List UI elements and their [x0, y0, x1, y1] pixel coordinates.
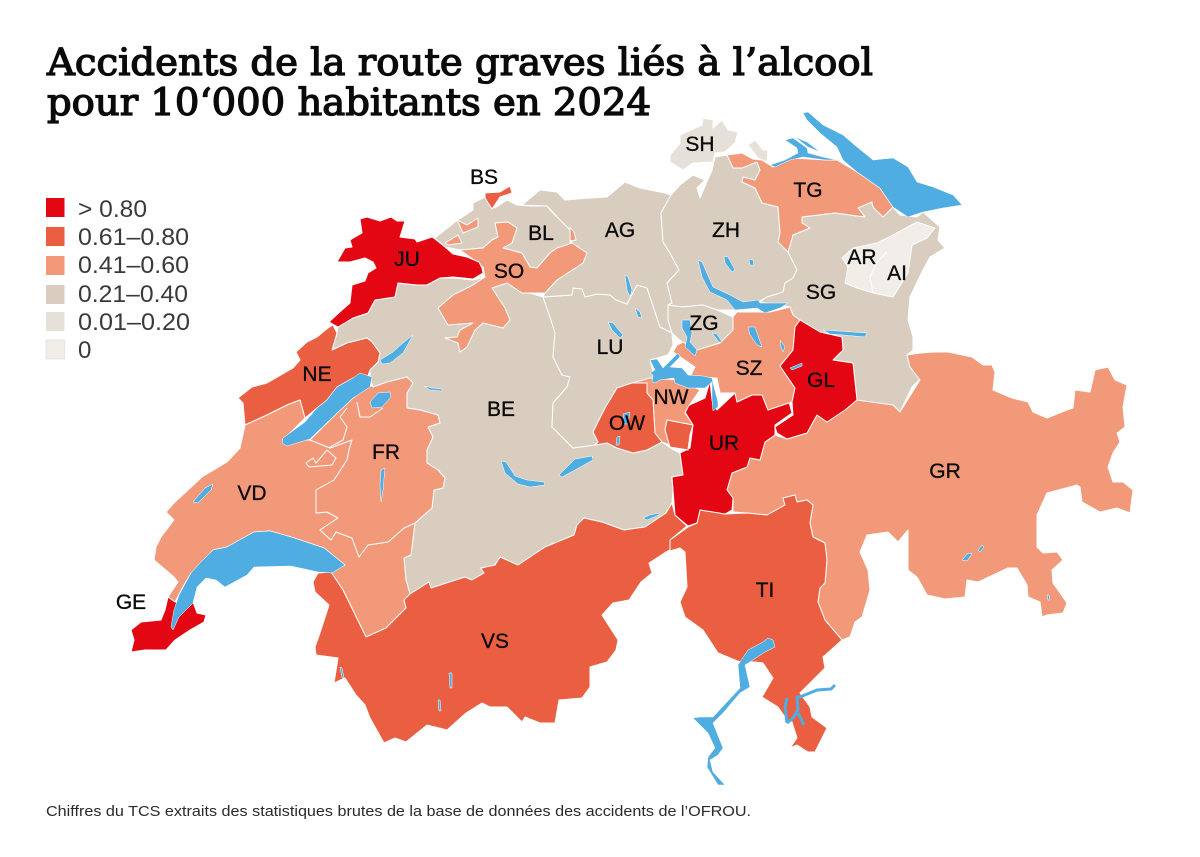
label: NE: NE [302, 363, 332, 386]
label: SH: SH [685, 133, 715, 156]
lake: Klöntal [790, 363, 802, 370]
lake: Thun [501, 461, 545, 487]
canton GL [775, 320, 857, 439]
legend: 0.01–0.20 [78, 309, 190, 336]
label: TI: TI [756, 579, 774, 602]
lake: Sarnen [623, 412, 630, 424]
lakes: Valais reservoirs [340, 667, 452, 711]
canton SH [670, 118, 768, 170]
label: TG: TG [793, 179, 823, 202]
label: FR: FR [372, 441, 400, 464]
lake: Hallwil [625, 275, 632, 297]
label: UR: UR [709, 432, 739, 455]
lake: Brienz [559, 456, 593, 477]
label: GR: GR [929, 460, 961, 483]
source note: Chiffres du TCS extraits des statistiques brutes de la base de données des accidents de l’OFROU. [46, 803, 751, 820]
canton GR [727, 352, 1133, 640]
label: AG: AG [605, 219, 635, 242]
lake: Baldegg [635, 308, 642, 318]
lake: Joux [193, 484, 213, 503]
canton LU [543, 285, 673, 448]
lakes [171, 112, 1050, 785]
label: ZG: ZG [689, 312, 719, 335]
title: pour 10‘000 habitants en 2024 [47, 81, 651, 124]
label: BL: BL [528, 222, 554, 245]
canton NE [238, 325, 380, 425]
canton labels [116, 133, 961, 653]
canton ZG [668, 305, 733, 350]
legend [46, 196, 190, 364]
map of Swiss cantons [116, 112, 1133, 785]
label: BE: BE [487, 398, 515, 421]
lake: Sihl [748, 327, 762, 347]
lake: Lungern [616, 436, 620, 445]
label: ZH: ZH [712, 219, 740, 242]
lake: Zug [682, 320, 697, 356]
label: SG: SG [806, 281, 836, 304]
lake: Ägeri [712, 333, 722, 342]
canton OW [593, 383, 693, 453]
label: AI: AI [887, 262, 907, 285]
canton NW [632, 378, 700, 445]
canton FR [306, 377, 445, 557]
lake: Lugano [785, 685, 835, 725]
label: GE: GE [116, 591, 146, 614]
lake: Walen [823, 330, 867, 337]
lake: Sempach [608, 322, 623, 338]
lake: Gruyère [380, 468, 385, 502]
canton BE [332, 277, 683, 594]
canton SZ [673, 307, 800, 410]
legend: 0.61–0.80 [78, 224, 189, 251]
title: Accidents de la route graves liés à l’alcool [46, 41, 873, 84]
canton TI [670, 495, 842, 752]
lakes: Engadine [962, 545, 1050, 600]
legend: 0 [78, 337, 91, 364]
lake: Biel [380, 335, 413, 364]
label: GL: GL [807, 369, 835, 392]
canton GE [131, 597, 206, 652]
lake: Morat [370, 392, 391, 408]
canton ZH [661, 155, 797, 310]
canton AR and AI [842, 222, 935, 297]
lake: Oeschinen [643, 513, 659, 520]
canton AG [517, 182, 679, 333]
lake: Maggiore [693, 638, 775, 785]
canton SG [760, 202, 945, 412]
canton SO [438, 218, 587, 352]
canton BS [485, 186, 512, 209]
canton BL [435, 197, 570, 268]
label: AR: AR [847, 246, 877, 269]
lake: Greifensee [724, 256, 735, 272]
legend: 0.21–0.40 [78, 281, 188, 308]
lake: Pfäffikersee [749, 259, 754, 265]
label: OW: OW [609, 412, 645, 435]
lake: Geneva [171, 531, 345, 630]
legend: > 0.80 [78, 196, 147, 223]
canton TG [727, 153, 893, 252]
canton VS [313, 503, 687, 743]
lake: Wägital [780, 340, 785, 352]
canton VD [154, 400, 415, 637]
label: VD: VD [237, 482, 267, 505]
label: VS: VS [481, 630, 509, 653]
label: SO: SO [494, 260, 524, 283]
title [46, 41, 873, 124]
lake: Lucerne [650, 353, 718, 411]
label: LU: LU [597, 336, 623, 359]
lake: Wohlen [424, 386, 442, 391]
label: NW: NW [654, 386, 689, 409]
label: BS: BS [470, 166, 498, 189]
lake: Constance [770, 112, 962, 217]
legend: 0.41–0.60 [78, 252, 189, 279]
label: SZ: SZ [736, 357, 763, 380]
canton UR [672, 381, 792, 526]
lake: Zurich [698, 260, 788, 313]
canton JU [329, 217, 483, 327]
lake: Neuchâtel [282, 373, 372, 446]
label: JU: JU [394, 248, 420, 271]
